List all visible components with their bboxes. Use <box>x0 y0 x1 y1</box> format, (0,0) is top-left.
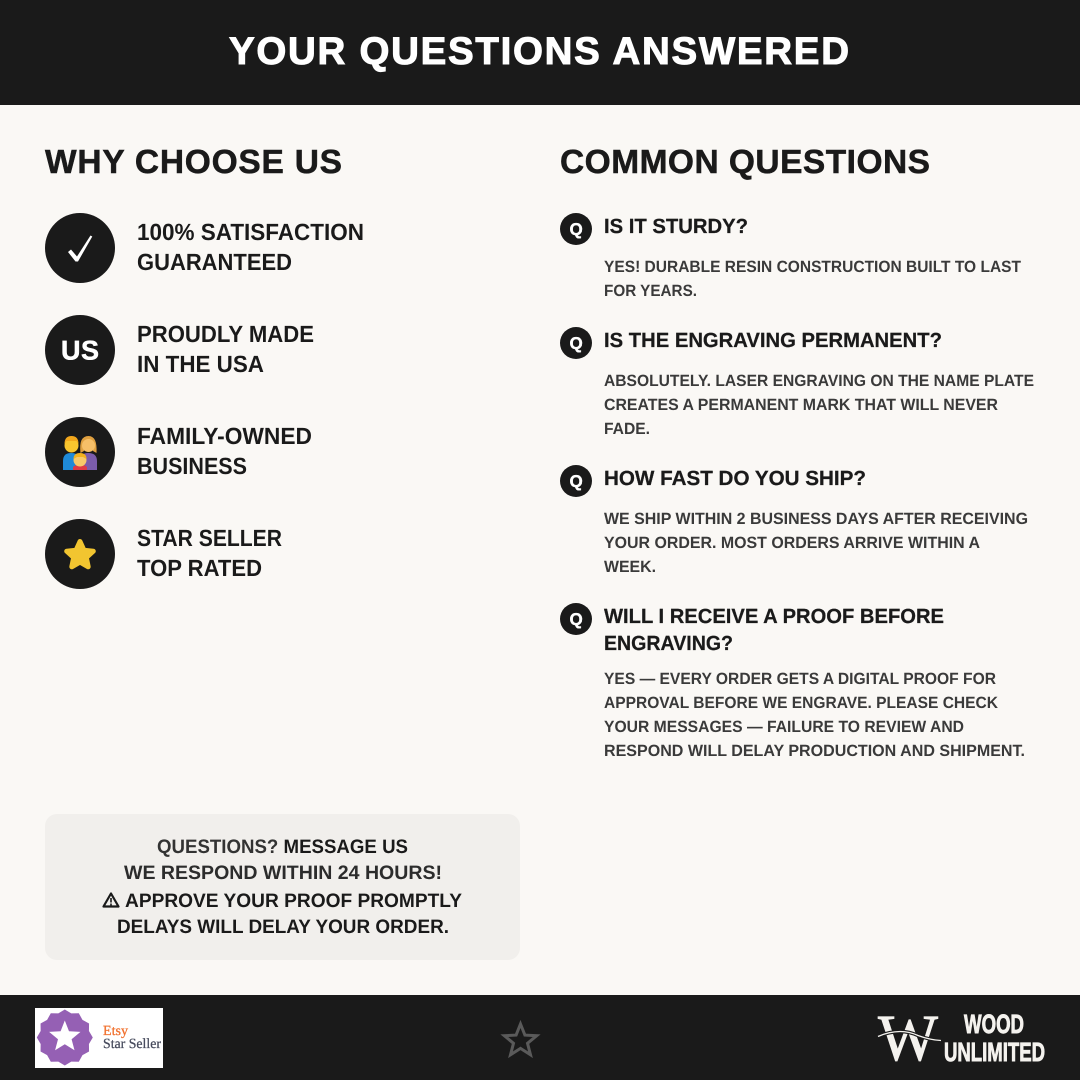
feature: family owned <box>45 417 312 487</box>
panel: common questions <box>560 144 1034 760</box>
feature: made in the usa: IN THE USA <box>137 351 264 377</box>
faq: proof before engraving: RESPOND WILL DELAY PRODUCTION AND SHIPMENT. <box>604 742 1025 760</box>
feature: family owned: FAMILY-OWNED <box>137 423 312 449</box>
callout: contact and proof reminder: QUESTIONS? MESSAGE US <box>157 836 408 858</box>
faq: engraving permanent: IS THE ENGRAVING PERMANENT? <box>604 329 942 352</box>
faq: is it sturdy: FOR YEARS. <box>604 282 697 300</box>
callout: contact and proof reminder: DELAYS WILL DELAY YOUR ORDER. <box>117 916 449 938</box>
header band with title: YOUR QUESTIONS ANSWERED <box>229 30 849 73</box>
icon: gold star <box>45 519 115 589</box>
callout: contact and proof reminder <box>45 814 520 960</box>
icon: check mark <box>45 213 115 283</box>
faq: is it sturdy: YES! DURABLE RESIN CONSTRUCTION BUILT TO LAST <box>604 258 1021 276</box>
faq: proof before engraving: APPROVAL BEFORE WE ENGRAVE. PLEASE CHECK <box>604 694 998 712</box>
logo: Wood Unlimited: WOOD <box>964 1009 1024 1039</box>
badge: Etsy Star Seller: Star Seller <box>103 1037 161 1052</box>
callout: contact and proof reminder: WE RESPOND WITHIN 24 HOURS! <box>124 862 442 884</box>
feature: made in the usa: PROUDLY MADE <box>137 321 314 347</box>
faq: shipping speed: WEEK. <box>604 558 656 576</box>
feature: family owned: BUSINESS <box>137 453 247 479</box>
callout: contact and proof reminder: APPROVE YOUR PROOF PROMPTLY <box>125 890 462 912</box>
icon: Q badge <box>560 465 592 497</box>
icon: family <box>45 417 115 487</box>
icon: US badge: US <box>61 336 99 366</box>
footer band <box>0 995 1080 1080</box>
faq: shipping speed: YOUR ORDER. MOST ORDERS ARRIVE WITHIN A <box>604 534 980 552</box>
icon: Q badge <box>560 603 592 635</box>
icon: Q badge: Q <box>570 220 583 239</box>
faq: engraving permanent <box>560 327 1034 438</box>
feature: satisfaction guaranteed <box>45 213 364 283</box>
feature: star seller: STAR SELLER <box>137 525 282 551</box>
icon: outline star <box>504 1024 537 1055</box>
logo: Wood Unlimited: W <box>878 1002 939 1075</box>
icon: Q badge: Q <box>570 610 583 629</box>
icon: Q badge: Q <box>570 334 583 353</box>
faq: shipping speed <box>560 465 1028 576</box>
icon: US badge <box>45 315 115 385</box>
faq: engraving permanent: FADE. <box>604 420 650 438</box>
faq: proof before engraving <box>560 603 1025 760</box>
faq: engraving permanent: CREATES A PERMANENT MARK THAT WILL NEVER <box>604 396 998 414</box>
feature: satisfaction guaranteed: 100% SATISFACTION <box>137 219 364 245</box>
feature: satisfaction guaranteed: GUARANTEED <box>137 249 292 275</box>
feature: star seller <box>45 519 282 589</box>
logo: Wood Unlimited <box>878 1002 1045 1075</box>
icon: warning triangle <box>104 894 118 906</box>
badge: Etsy Star Seller <box>35 1008 163 1068</box>
feature: made in the usa <box>45 315 314 385</box>
icon: Q badge <box>560 327 592 359</box>
faq: shipping speed: HOW FAST DO YOU SHIP? <box>604 467 866 490</box>
heading: why choose us: WHY CHOOSE US <box>45 144 342 181</box>
header band with title <box>0 0 1080 105</box>
panel: why choose us <box>45 144 364 589</box>
icon: Q badge: Q <box>570 472 583 491</box>
faq: is it sturdy: IS IT STURDY? <box>604 215 748 238</box>
faq: engraving permanent: ABSOLUTELY. LASER ENGRAVING ON THE NAME PLATE <box>604 372 1034 390</box>
faq: proof before engraving: YOUR MESSAGES — FAILURE TO REVIEW AND <box>604 718 964 736</box>
feature: star seller: TOP RATED <box>137 555 262 581</box>
faq: shipping speed: WE SHIP WITHIN 2 BUSINESS DAYS AFTER RECEIVING <box>604 510 1028 528</box>
icon: Q badge <box>560 213 592 245</box>
faq: proof before engraving: ENGRAVING? <box>604 632 733 655</box>
badge: Etsy Star Seller: Etsy <box>103 1024 128 1039</box>
faq: proof before engraving: WILL I RECEIVE A PROOF BEFORE <box>604 605 944 628</box>
faq: is it sturdy <box>560 213 1021 300</box>
heading: common questions: COMMON QUESTIONS <box>560 144 930 181</box>
faq: proof before engraving: YES — EVERY ORDER GETS A DIGITAL PROOF FOR <box>604 670 996 688</box>
